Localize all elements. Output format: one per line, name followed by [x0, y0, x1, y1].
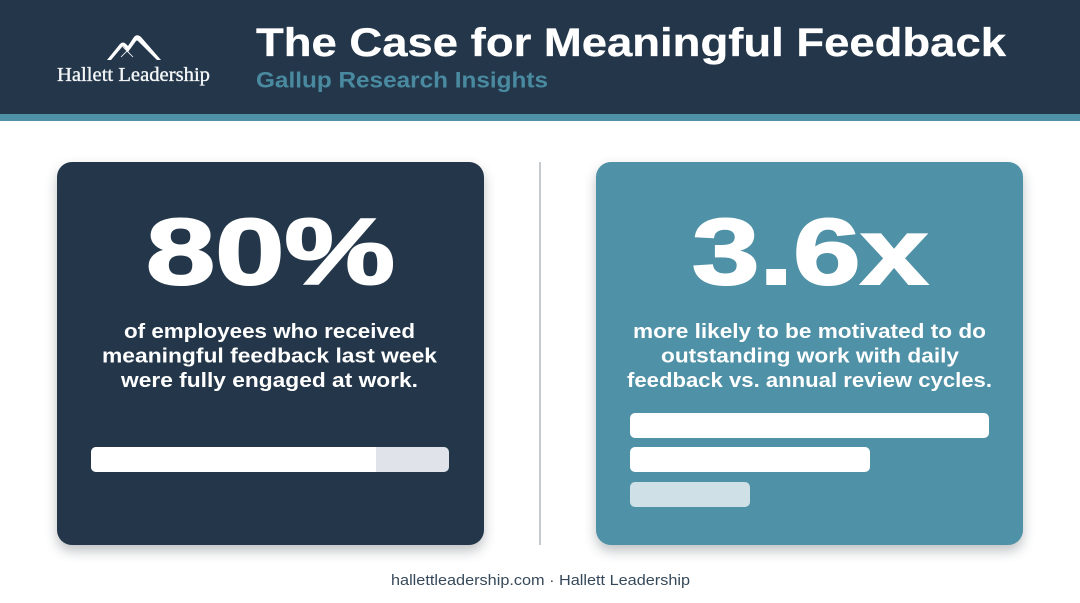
- divider: [539, 162, 541, 545]
- big number: 80%: 80%: [146, 199, 395, 304]
- description text: meaningful feedback last week: [102, 346, 438, 368]
- title: The Case for Meaningful Feedback: [256, 21, 1007, 65]
- bar: annual review: [630, 482, 750, 507]
- description text: of employees who received: [124, 321, 415, 343]
- bar: daily feedback: [630, 413, 989, 438]
- logo: Hallett Leadership: [57, 35, 210, 86]
- description text: [627, 321, 992, 392]
- panel: 3.6x motivated: [596, 162, 1023, 545]
- description text: outstanding work with daily: [661, 346, 960, 368]
- description text: more likely to be motivated to do: [633, 321, 986, 343]
- big number: 3.6x: 3.6x: [692, 199, 928, 304]
- description text: were fully engaged at work.: [120, 370, 418, 392]
- bar: middle: [630, 447, 870, 472]
- logo wordmark: Hallett Leadership: [57, 64, 210, 86]
- panel: 80% engaged: [57, 162, 484, 545]
- subtitle: Gallup Research Insights: [256, 68, 548, 92]
- icon: mountain peaks: [107, 35, 161, 60]
- description text: [102, 321, 438, 392]
- progress bar: 80 percent: [91, 447, 449, 472]
- description text: feedback vs. annual review cycles.: [627, 370, 992, 392]
- header band: [0, 0, 1080, 121]
- footer text: hallettleadership.com · Hallett Leadership: [391, 572, 690, 589]
